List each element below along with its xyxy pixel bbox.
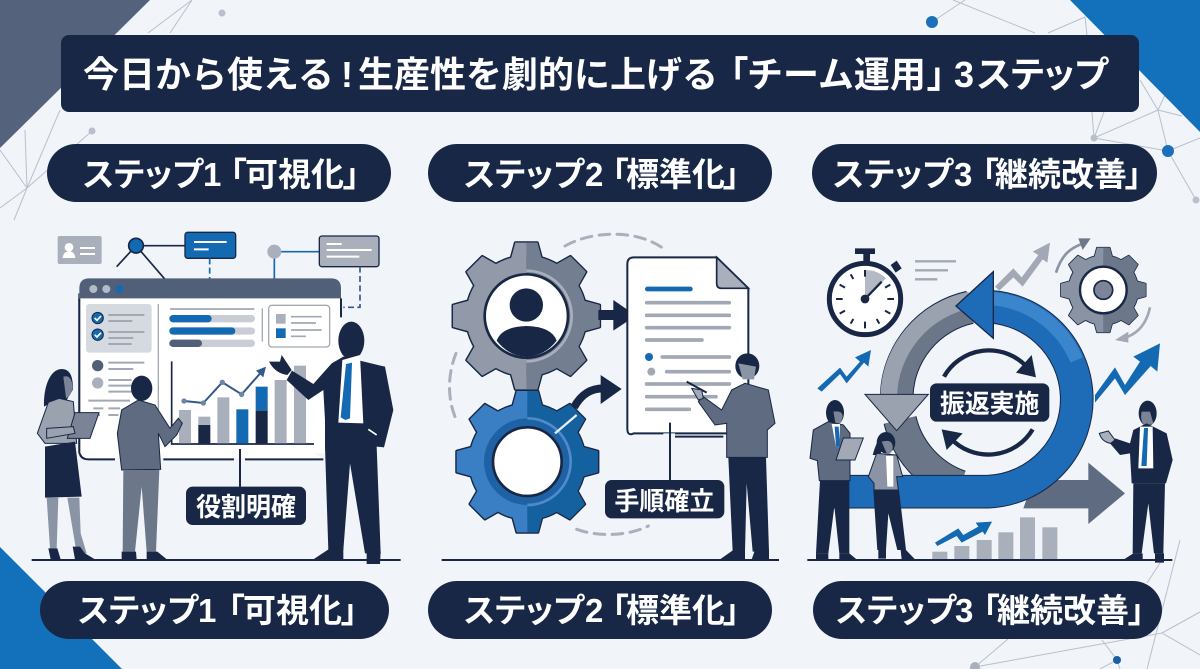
heading: step 3 bottom: ステップ xyxy=(836,592,957,629)
title: 」 xyxy=(927,54,945,95)
heading: step 3 bottom: 「 xyxy=(983,592,1000,629)
heading: step 2 bottom: ステップ xyxy=(464,592,585,629)
heading: step 2 bottom: 」 xyxy=(723,592,740,629)
person: woman with tablet xyxy=(37,369,99,559)
heading: step 1 top: 1 xyxy=(203,156,221,193)
heading: step 2 bottom xyxy=(428,581,772,639)
title xyxy=(61,35,1139,112)
arrow: dark gray forward arrow xyxy=(1023,463,1125,524)
heading: step 2 top xyxy=(428,144,772,202)
document xyxy=(627,257,748,439)
heading: step 1 bottom: 「 xyxy=(228,592,245,629)
title: 今日から使える xyxy=(83,54,334,95)
heading: step 3 top: 継続改善 xyxy=(995,156,1127,193)
callout: role clarity: 役割明確 xyxy=(196,492,296,522)
heading: step 3 top: 「 xyxy=(982,156,999,193)
panel: step 3 continuous improvement illustration xyxy=(807,238,1173,563)
dashboard window xyxy=(79,278,341,459)
icon: gray gear with person xyxy=(453,243,600,389)
panel: step 1 visualization illustration xyxy=(32,232,401,564)
heading: step 2 top: 標準化 xyxy=(626,156,725,193)
title: ! xyxy=(341,54,353,95)
heading: step 3 top: 」 xyxy=(1125,156,1142,193)
heading: step 3 top: 3 xyxy=(954,156,972,193)
heading: step 3 top xyxy=(812,144,1157,202)
heading: step 2 bottom: 「 xyxy=(612,592,629,629)
title: チーム運用 xyxy=(747,54,926,95)
heading: step 3 top: ステップ xyxy=(833,156,954,193)
heading: step 1 top xyxy=(47,144,391,202)
heading: step 1 bottom: 可視化 xyxy=(243,592,342,629)
heading: step 1 top: 」 xyxy=(343,156,360,193)
bar chart with blue arrow xyxy=(932,517,1057,559)
callout: retrospectives held: 振返実施 xyxy=(940,391,1039,419)
heading: step 2 top: ステップ xyxy=(464,156,585,193)
bar chart with trend line xyxy=(172,361,314,444)
arrow: small blue trend xyxy=(817,350,871,392)
person: man in gray suit xyxy=(117,376,182,560)
arrow: big blue trend xyxy=(1095,343,1160,403)
arrow: from blue gear to document xyxy=(574,375,622,407)
heading: step 3 bottom: 継続改善 xyxy=(997,592,1129,629)
heading: step 1 bottom xyxy=(40,581,389,639)
person: presenter in navy suit xyxy=(269,322,393,564)
heading: step 3 bottom: 3 xyxy=(955,592,973,629)
heading: step 3 bottom xyxy=(813,581,1162,639)
heading: step 1 top: 「 xyxy=(230,156,247,193)
icon: id card xyxy=(58,236,102,264)
icon: stopwatch xyxy=(829,248,956,335)
gray node with callout card xyxy=(267,236,379,309)
heading: step 3 bottom: 」 xyxy=(1128,592,1144,629)
arrow: gray trend xyxy=(995,243,1050,291)
inner loop arrows xyxy=(942,350,1036,455)
heading: step 2 top: 「 xyxy=(612,156,629,193)
arrow: from gray gear to document xyxy=(598,300,636,331)
network node with blue card xyxy=(117,232,236,285)
heading: step 1 top: ステップ xyxy=(83,156,204,193)
panel: step 2 standardization illustration xyxy=(442,234,779,560)
person: man gesturing xyxy=(1099,401,1173,563)
heading: step 2 top: 2 xyxy=(585,156,603,193)
heading: step 2 bottom: 2 xyxy=(585,592,603,629)
callout: procedure established: 手順確立 xyxy=(614,488,714,516)
cycle arrows xyxy=(833,272,1077,492)
callout: role clarity xyxy=(186,449,306,525)
heading: step 1 bottom: ステップ xyxy=(78,592,199,629)
callout: retrospectives held xyxy=(930,383,1049,422)
person: woman xyxy=(868,432,915,559)
title: 生産性を劇的に上げる xyxy=(358,54,718,95)
heading: step 2 bottom: 標準化 xyxy=(626,592,725,629)
heading: step 2 top: 」 xyxy=(723,156,740,193)
title: ステップ xyxy=(977,54,1109,95)
icon: blue gear xyxy=(457,391,598,532)
heading: step 1 top: 可視化 xyxy=(245,156,344,193)
icon: gear with rotation arrows xyxy=(1056,238,1150,343)
title: 「 xyxy=(730,54,748,95)
person: man with tablet xyxy=(810,400,863,560)
title: 3 xyxy=(954,54,974,95)
heading: step 1 bottom: 」 xyxy=(341,592,358,629)
heading: step 1 bottom: 1 xyxy=(198,592,216,629)
callout: procedure established xyxy=(605,423,724,518)
person: man pointing at document xyxy=(687,353,775,559)
